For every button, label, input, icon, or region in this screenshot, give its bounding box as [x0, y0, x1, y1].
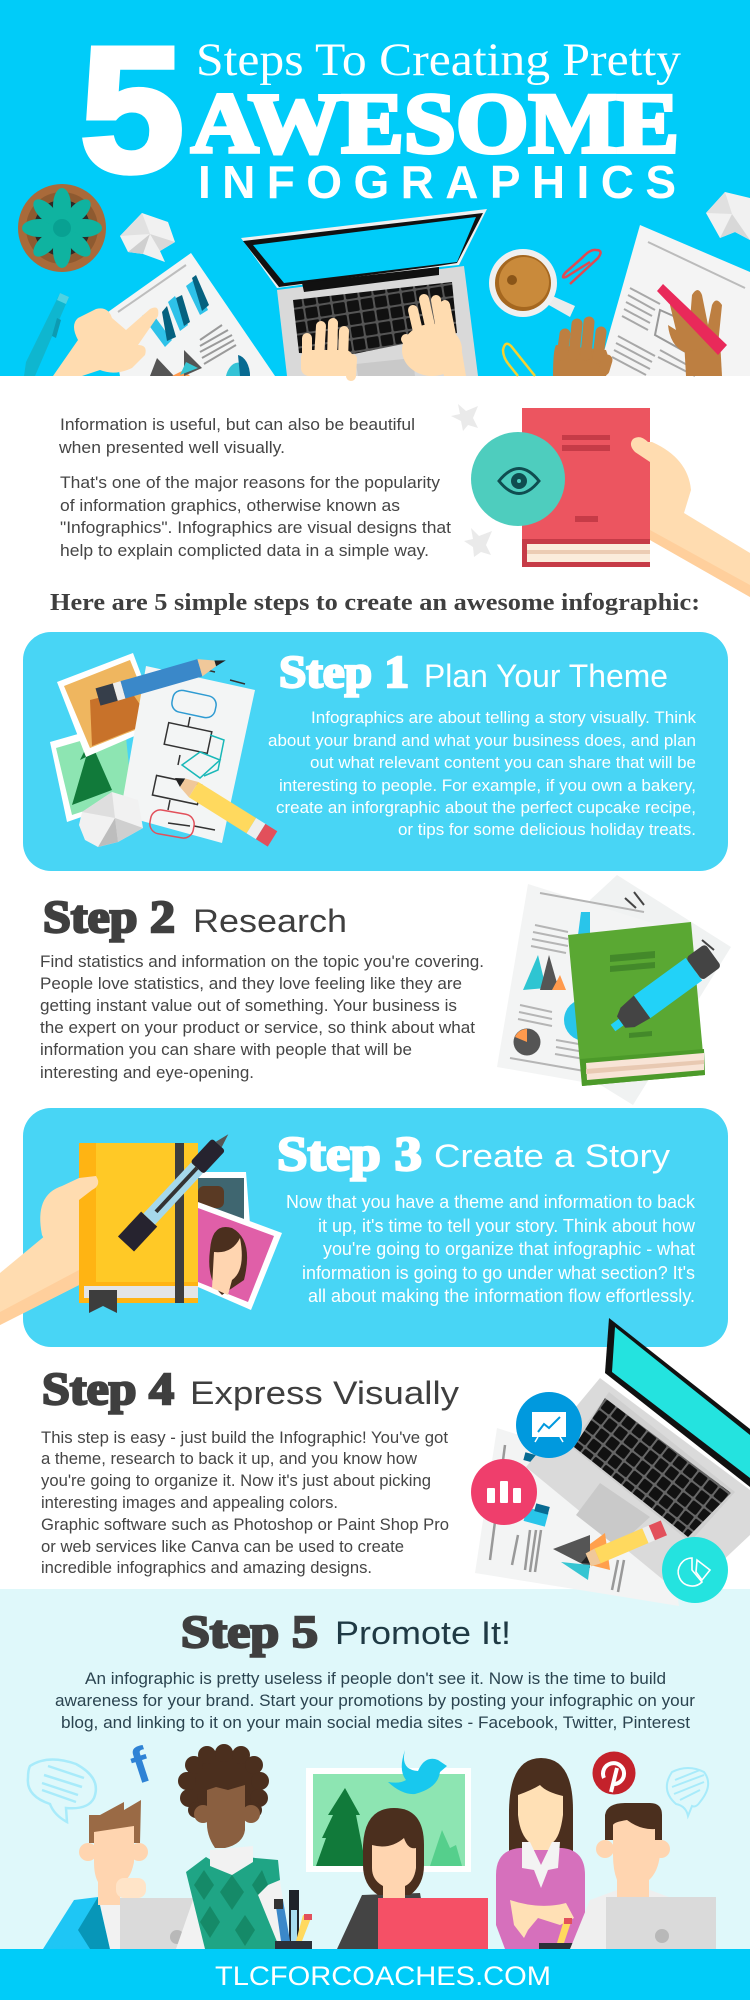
step 3 text: it up, it's time to tell your story. Think about how [318, 1216, 696, 1236]
heading: Here are 5 simple steps to create an awesome infographic: [50, 590, 700, 616]
footer: TLCFORCOACHES.COM [215, 1961, 551, 1991]
icon: brown hand with pencil [657, 284, 727, 376]
icon: blue pencil [96, 652, 228, 706]
icon: crumpled paper left [120, 213, 175, 262]
intro text: help to explain complicted data in a simple way. [60, 542, 429, 560]
step 4 text: incredible infographics and amazing designs. [41, 1559, 372, 1577]
icon: crumpled paper [79, 792, 143, 847]
step 3 text: you're going to organize that infographic - what [323, 1239, 695, 1259]
step 4 text: a theme, research to back it up, and you know how [41, 1450, 417, 1468]
icon: twitter bird [388, 1750, 447, 1794]
step 1 text: about your brand and what your business does, and plan [268, 731, 696, 750]
step 4 text: This step is easy - just build the Infographic! You've got [41, 1429, 448, 1447]
illustration: plan photos and paper [50, 652, 277, 847]
step 4 text: you're going to organize it. Now it's just about picking [41, 1472, 431, 1490]
title: Steps To Creating Pretty [196, 34, 682, 86]
icon: eye badge [471, 432, 565, 526]
step 1 text: create an inforgraphic about the perfect cupcake recipe, [276, 798, 696, 817]
illustration: newspaper [597, 225, 750, 376]
icon: pinterest [592, 1752, 636, 1794]
icon: pencil [578, 1520, 667, 1570]
step 4 title [42, 1364, 459, 1414]
step 4 text: Graphic software such as Photoshop or Paint Shop Pro [41, 1516, 449, 1534]
step 1 text [268, 708, 696, 839]
icon: presentation badge [516, 1392, 582, 1458]
step 4 text: interesting images and appealing colors. [41, 1494, 338, 1512]
icon: yellow pencil [170, 770, 277, 847]
icon: highlighter [605, 944, 722, 1039]
icon: paper clips [503, 250, 601, 376]
icon: laptop [241, 209, 487, 376]
icon: pie chart badge [662, 1537, 728, 1603]
step 5 text: An infographic is pretty useless if people don't see it. Now is the time to build [85, 1670, 666, 1688]
title: 5 [80, 10, 184, 209]
icon: typing hands [301, 299, 466, 376]
intro text: "Infographics". Infographics are visual designs that [60, 519, 451, 537]
step 4 title: Express Visually [190, 1375, 459, 1411]
person: man with argyle vest [176, 1744, 290, 1949]
step 2 title: Step 2 [43, 892, 175, 942]
intro text: That's one of the major reasons for the popularity [60, 474, 441, 492]
step 5 text: awareness for your brand. Start your promotions by posting your infographic on your [55, 1692, 696, 1710]
icon: decorative stars [451, 404, 492, 557]
person: woman in pink [496, 1758, 585, 1949]
icon: facebook: f [124, 1736, 157, 1795]
intro text: of information graphics, otherwise known as [60, 497, 400, 515]
step 5 title [181, 1607, 511, 1657]
step 2 text [40, 953, 484, 1082]
step 2 text: the expert on your product or service, so think about what [40, 1019, 475, 1037]
illustration: hand holding red book [522, 408, 750, 597]
icon: speech bubble right [667, 1768, 708, 1816]
icon: brown hand [553, 322, 609, 376]
step 3 title: Create a Story [434, 1138, 670, 1174]
step 3 title: Step 3 [277, 1126, 422, 1181]
illustration: research papers and green book [497, 875, 731, 1105]
illustration: chart paper [108, 253, 275, 376]
step 3 text: all about making the information flow effortlessly. [308, 1286, 695, 1306]
intro text: when presented well visually. [58, 439, 285, 457]
step 5 text [55, 1670, 696, 1732]
step 3 title [277, 1126, 670, 1181]
step 3 text: Now that you have a theme and information to back [286, 1192, 696, 1212]
step 2 title [43, 892, 347, 942]
intro text [58, 416, 451, 560]
title: INFOGRAPHICS [198, 156, 676, 208]
icon: bar chart badge [471, 1459, 537, 1525]
step 5 text: blog, and linking to it on your main social media sites - Facebook, Twitter, Pinterest [61, 1714, 690, 1732]
step 1 title: Step 1 [279, 647, 409, 697]
footer [0, 1949, 750, 2000]
step 4 text: or web services like Canva can be used to create [41, 1538, 404, 1556]
step 2 text: People love statistics, and they love feeling like they are [40, 975, 462, 993]
step 1 text: out what relevant content you can share that will be [310, 753, 696, 772]
illustration: hand, notebook, photos [0, 1127, 282, 1325]
step 5 title: Step 5 [181, 1607, 318, 1657]
icon: crumpled paper right [706, 192, 750, 240]
icon: pointing hand [53, 308, 158, 376]
step 2 text: information you can share with people that will be [40, 1041, 412, 1059]
step 3 text [286, 1192, 696, 1306]
step 1 text: or tips for some delicious holiday treats. [398, 820, 696, 839]
step 2 text: Find statistics and information on the topic you're covering. [40, 953, 484, 971]
icon: potted plant [18, 184, 106, 272]
icon: speech bubble left [28, 1759, 96, 1822]
step 2 title: Research [193, 903, 347, 939]
step 3 text: information is going to go under what section? It's [302, 1263, 695, 1283]
step 1 title [279, 647, 668, 697]
step 5 background [0, 1589, 750, 1949]
title: AWESOME [191, 75, 679, 171]
title [80, 10, 682, 209]
person: man with grey laptop [570, 1803, 716, 1949]
step 4 text [41, 1429, 449, 1577]
step 1 text: interesting to people. For example, if you own a bakery, [279, 776, 696, 795]
step 5 title: Promote It! [335, 1615, 511, 1651]
panel: step 1 [23, 632, 728, 871]
icon: pen [24, 293, 69, 376]
intro text: Information is useful, but can also be beautiful [60, 416, 415, 434]
icon: pen cup right [539, 1918, 575, 1949]
illustration: laptop with charts [471, 1318, 750, 1606]
person: man with blue jacket [43, 1800, 232, 1949]
step 1 title: Plan Your Theme [424, 658, 668, 694]
person: woman with red laptop [337, 1808, 488, 1949]
step 1 text: Infographics are about telling a story visually. Think [311, 708, 696, 727]
icon: pen [118, 1127, 236, 1252]
icon: coffee cup [489, 249, 575, 317]
panel: step 3 [0, 1108, 728, 1347]
illustration: framed landscape [306, 1768, 471, 1872]
header background [0, 0, 750, 376]
step 2 text: interesting and eye-opening. [40, 1064, 254, 1082]
step 2 text: getting instant value out of something. Your business is [40, 997, 457, 1015]
step 4 title: Step 4 [42, 1364, 174, 1414]
icon: pen cup left [274, 1890, 312, 1949]
